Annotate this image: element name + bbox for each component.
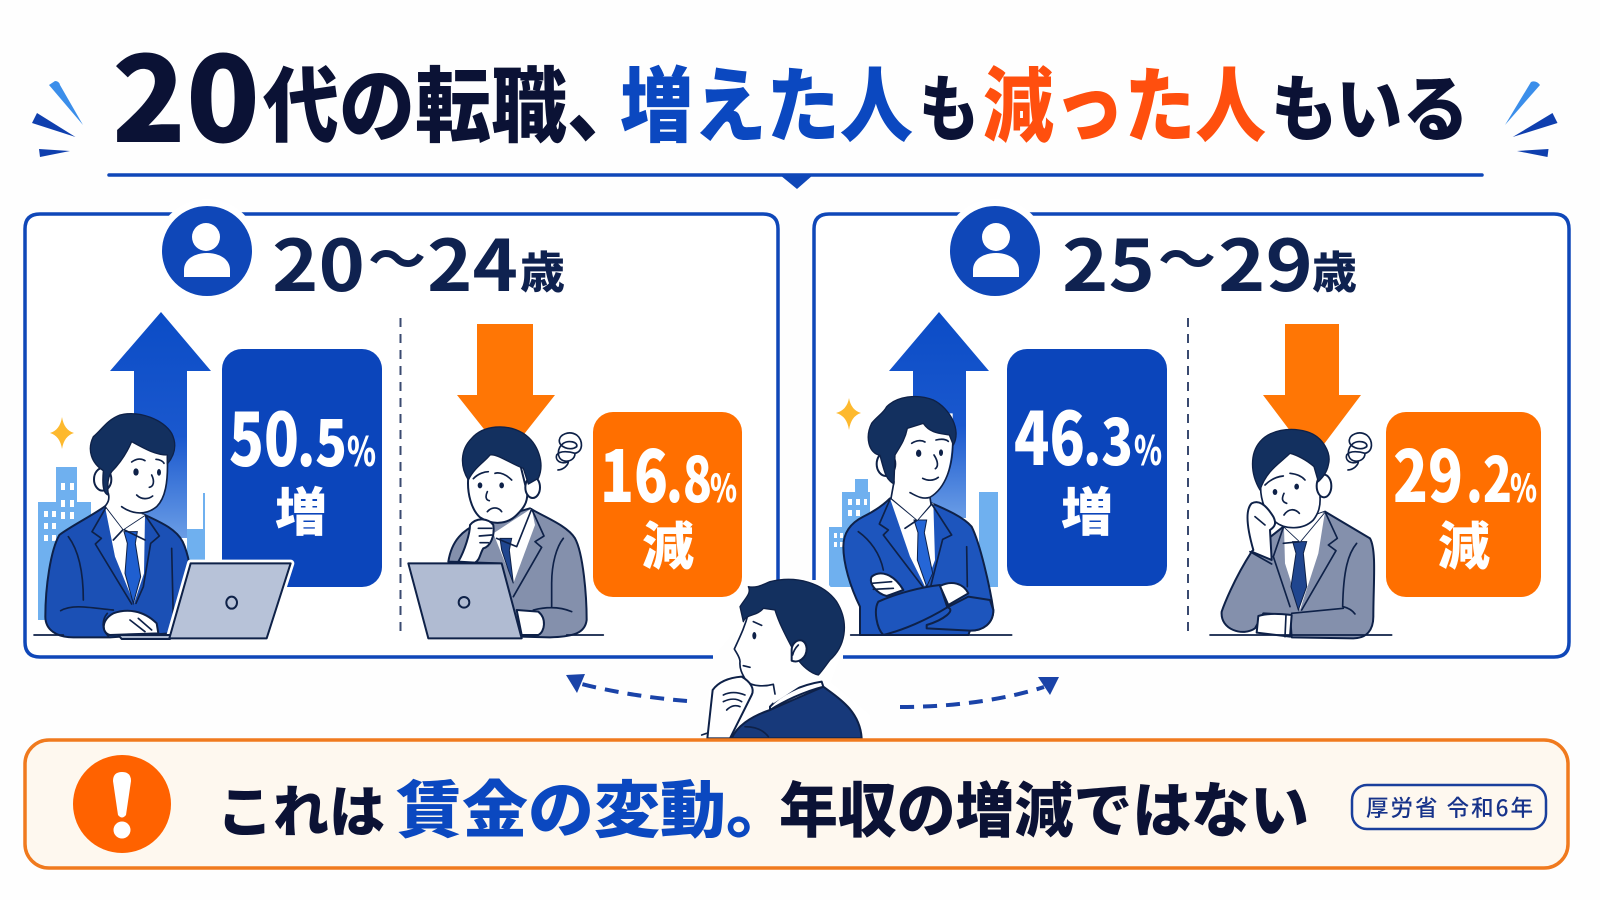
arrow: dashed to left panel [566, 674, 687, 701]
title: 減った人 [983, 40, 1266, 159]
divider [1187, 318, 1189, 637]
stat box: 46.3% increase: .3 [1083, 393, 1133, 484]
note text [217, 760, 1309, 850]
stat box: 50.5% increase: .5 [297, 394, 347, 485]
age heading [1062, 210, 1357, 312]
arrow: down orange [457, 324, 555, 457]
stat box: 16.8% decrease: .8 [666, 430, 712, 520]
arrow: dashed to right panel [900, 677, 1059, 707]
age heading: ～ [1158, 216, 1216, 297]
age heading [272, 210, 565, 312]
title underline with pointer [109, 175, 1482, 189]
stat box: 29.2% decrease: % [1510, 458, 1537, 513]
person: confident man arms crossed [843, 397, 1012, 635]
icon: right emphasis marks [1505, 81, 1558, 157]
panel frame left [25, 214, 778, 657]
panel frame right [814, 214, 1569, 657]
source pill [1352, 785, 1546, 829]
stat box: 16.8% decrease: % [710, 458, 737, 513]
source pill: 厚労省 令和6年 [1366, 791, 1533, 823]
title [112, 5, 1469, 176]
person: thinking man centre [702, 579, 867, 738]
arrow: down orange [1263, 324, 1361, 460]
buildings [38, 467, 205, 620]
stat box: 29.2% decrease: 29 [1393, 421, 1463, 523]
panel: 20-24 years [25, 202, 778, 657]
stat box: 29.2% decrease: .2 [1466, 430, 1512, 520]
stat box: 50.5% increase: % [347, 420, 376, 478]
person: worried man with laptop [408, 427, 603, 638]
stat box: 50.5% increase: 増 [275, 471, 327, 546]
divider [400, 318, 402, 637]
title: 増えた人 [620, 40, 913, 159]
stat box: 16.8% decrease: 16 [600, 421, 668, 523]
arrow: up blue [889, 312, 989, 518]
stat box: 50.5% increase: 50 [229, 382, 299, 488]
age badge icon [158, 202, 256, 300]
stat box: 29.2% decrease: 減 [1438, 505, 1490, 580]
note text: 年収の増減ではない [779, 763, 1309, 850]
person: worried man hand on cheek [1210, 429, 1392, 638]
title: 20 [112, 5, 260, 176]
age heading: 29 [1218, 210, 1313, 312]
stat box: 50.5% increase [222, 349, 382, 587]
arrow: up blue [110, 312, 211, 538]
age badge icon [946, 202, 1044, 300]
age heading: 24 [427, 210, 518, 312]
panel: bottom note [25, 740, 1568, 868]
stat box: 46.3% increase: % [1134, 419, 1162, 477]
stat box: 16.8% decrease [593, 412, 742, 597]
age heading: 歳 [1312, 237, 1357, 301]
icon: sparkle [836, 398, 861, 430]
stat box: 29.2% decrease [1386, 412, 1541, 597]
title: もいる [1271, 51, 1469, 156]
age heading: 25 [1062, 210, 1155, 312]
person: happy man with laptop [34, 414, 291, 639]
stat box: 16.8% decrease: 減 [642, 505, 694, 580]
note text: これは [217, 768, 385, 849]
note text: 賃金の変動。 [396, 760, 792, 850]
icon: sparkle [50, 417, 74, 449]
icon: left emphasis marks [32, 81, 83, 157]
stat box: 46.3% increase [1007, 349, 1167, 586]
title: 代の転職、 [263, 40, 643, 159]
panel: 25-29 years [814, 202, 1569, 657]
icon: exclamation [73, 755, 171, 853]
title: も [919, 51, 979, 156]
buildings [829, 479, 998, 587]
age heading: ～ [368, 216, 426, 297]
age heading: 20 [272, 210, 365, 312]
stat box: 46.3% increase: 46 [1014, 381, 1085, 487]
age heading: 歳 [520, 237, 565, 301]
stat box: 46.3% increase: 増 [1061, 471, 1113, 546]
